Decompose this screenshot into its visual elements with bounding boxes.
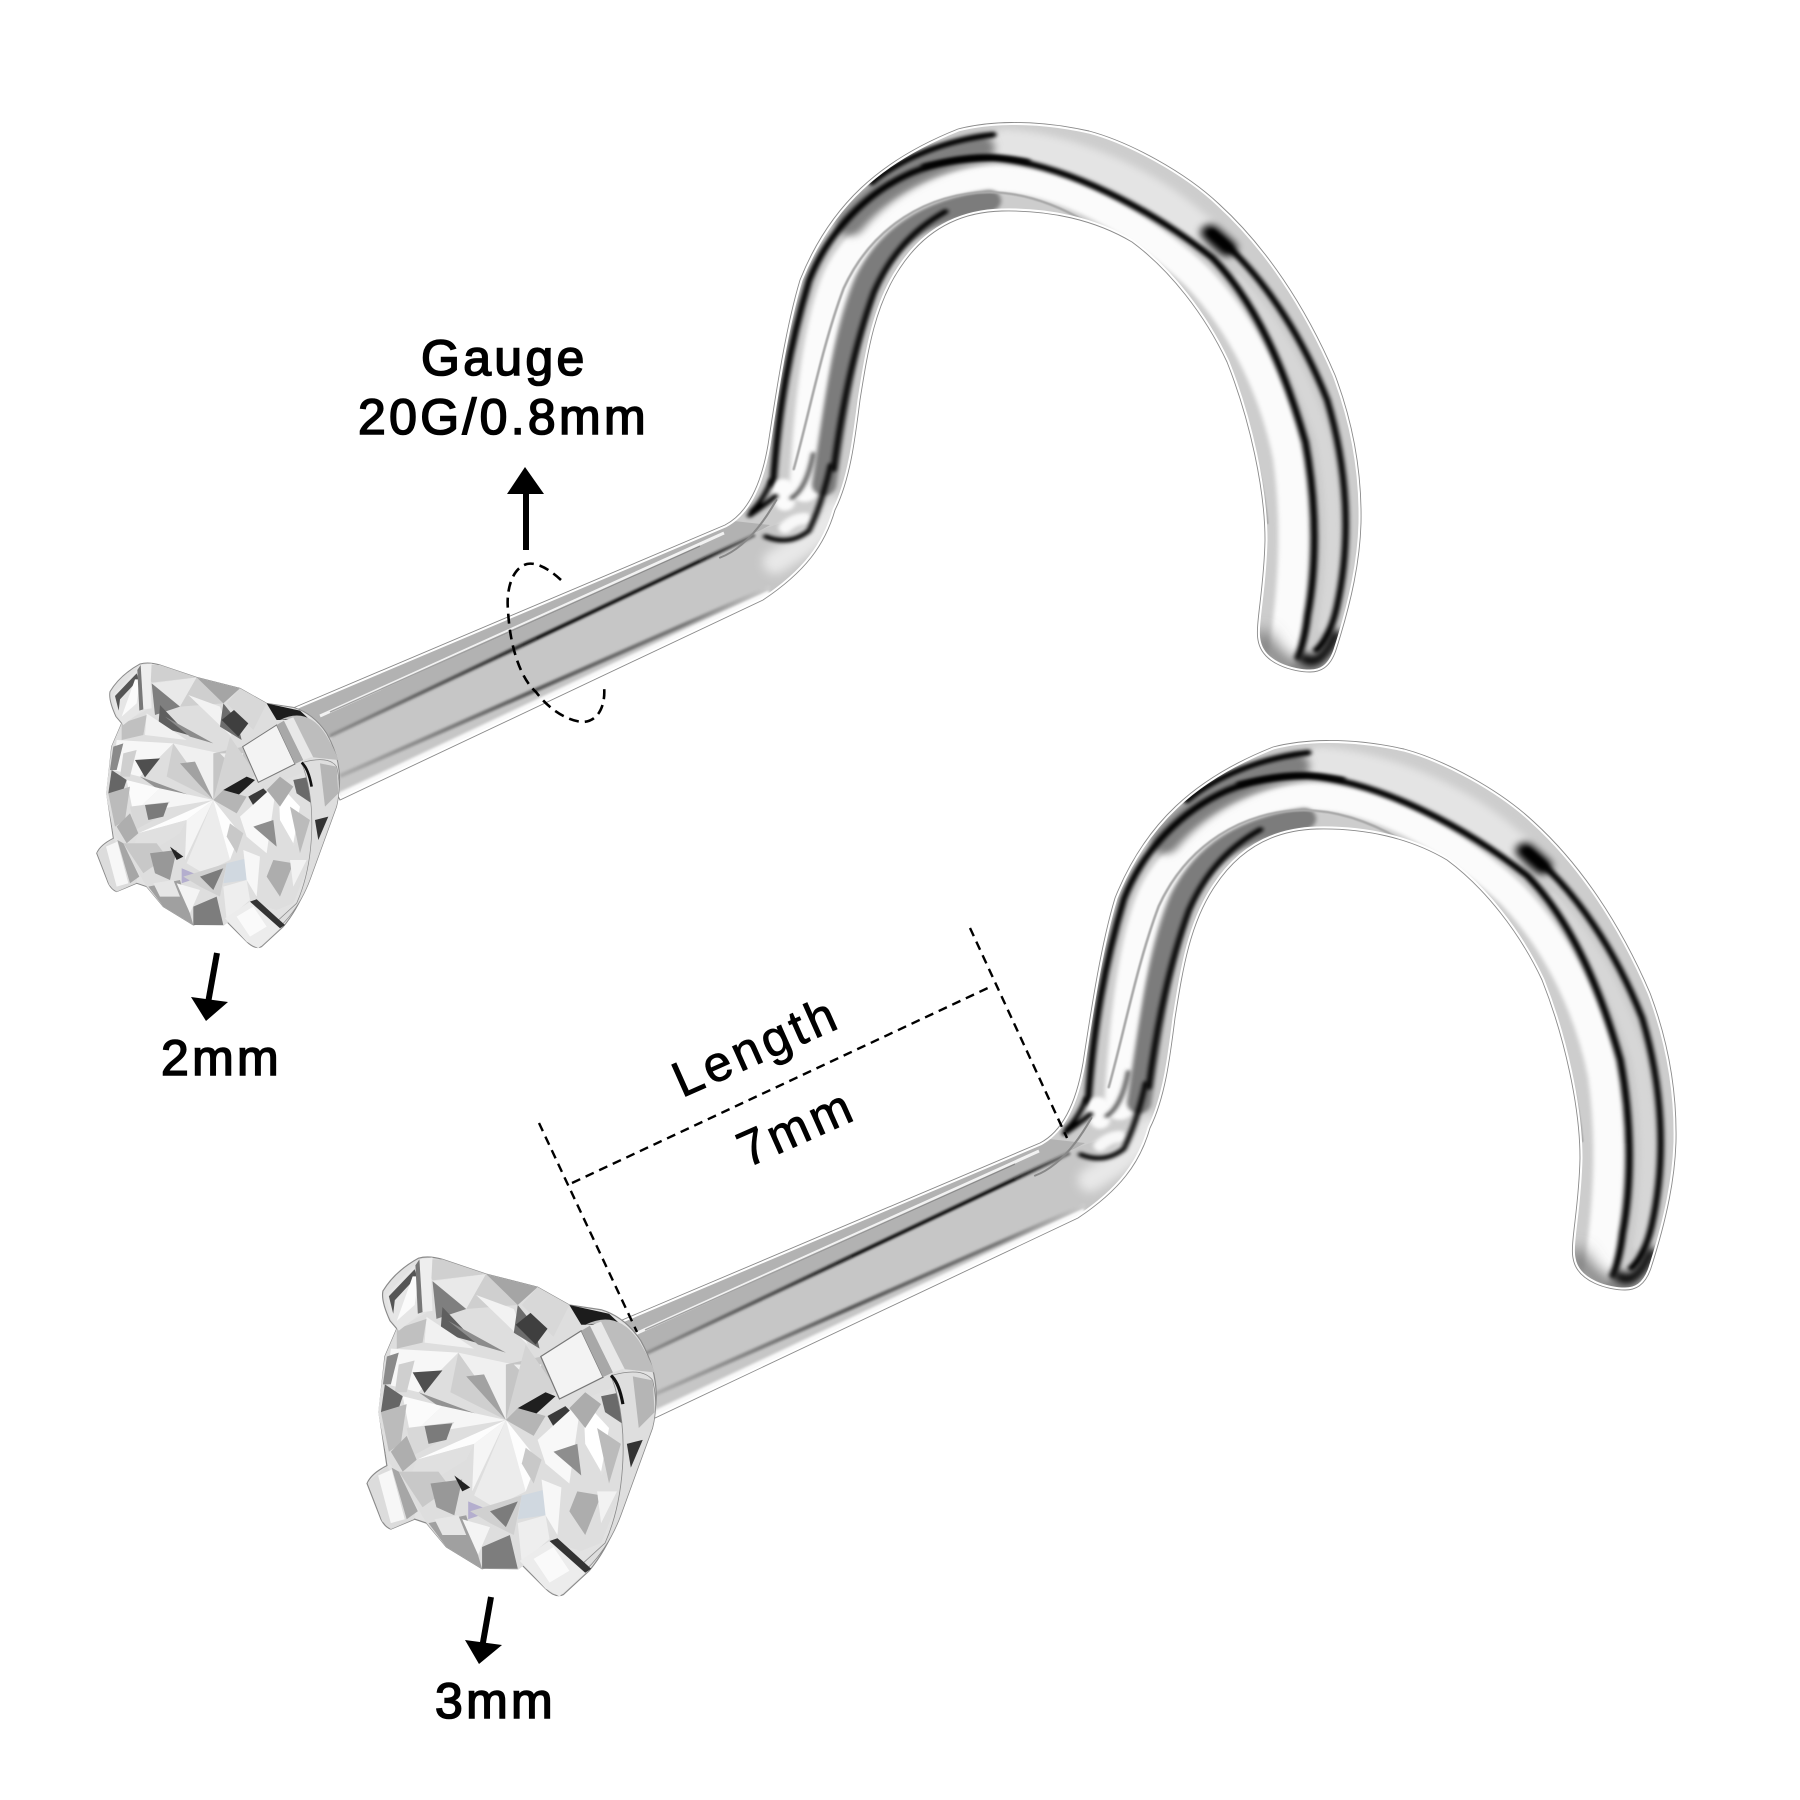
gauge label bbox=[358, 330, 649, 445]
arrow: 2mm gem size bbox=[191, 953, 228, 1021]
2mm gem setting bbox=[97, 663, 340, 948]
hook and stem bbox=[280, 122, 1361, 805]
length dimension lines bbox=[539, 928, 1067, 1332]
gauge label: Gauge bbox=[421, 330, 588, 386]
hook and stem bbox=[595, 740, 1676, 1423]
gauge label: 20G/0.8mm bbox=[358, 389, 649, 445]
pin 1: small nose screw bbox=[97, 122, 1361, 948]
dashed gauge ellipse bbox=[508, 564, 604, 722]
label: 3mm: 3mm bbox=[435, 1673, 556, 1729]
3mm gem setting bbox=[367, 1257, 656, 1597]
arrow: gauge up bbox=[507, 467, 544, 550]
pin 2: large nose screw bbox=[367, 740, 1676, 1597]
label: length: 7mm bbox=[729, 1077, 864, 1178]
label: 2mm: 2mm bbox=[161, 1030, 282, 1086]
label: length: Length bbox=[664, 985, 848, 1108]
arrow: 3mm gem size bbox=[465, 1597, 502, 1664]
label: length bbox=[664, 985, 864, 1178]
